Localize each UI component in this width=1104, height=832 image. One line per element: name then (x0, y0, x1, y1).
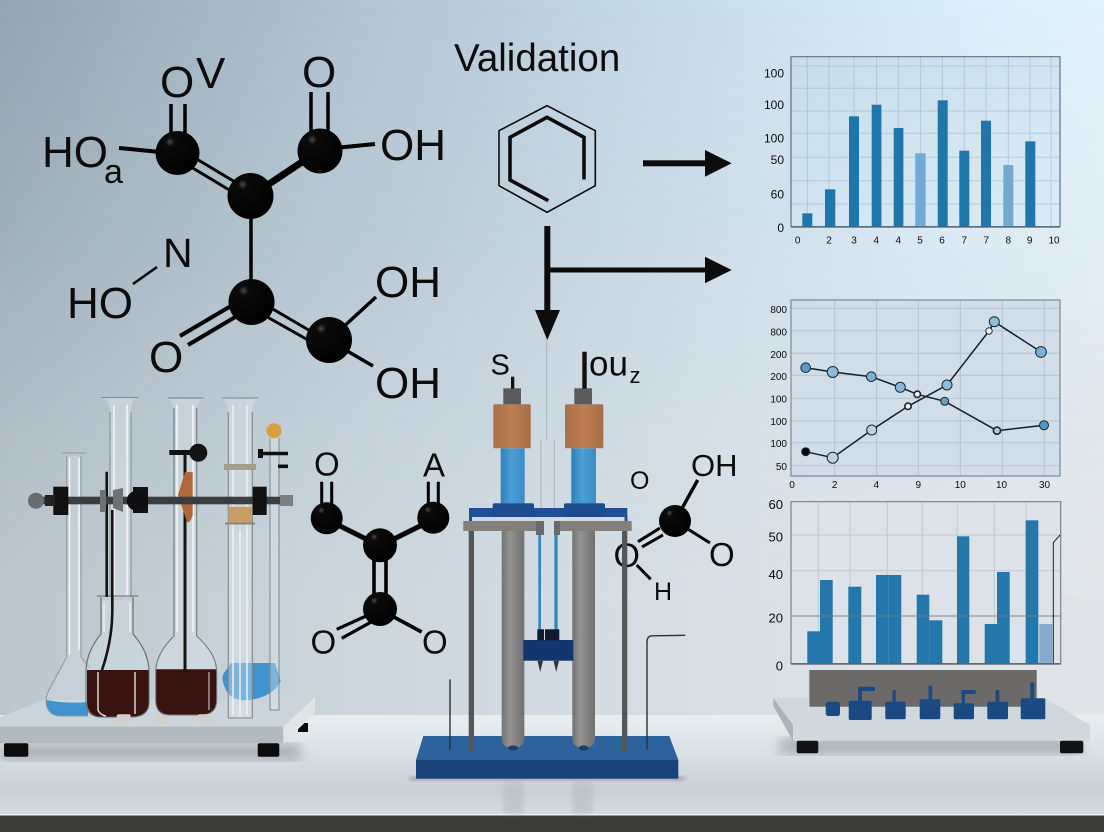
y axis labels: 60 (769, 497, 783, 512)
molecule: lower centre-left: O (314, 446, 340, 482)
y axis labels: 800 (770, 305, 787, 316)
atom labels (42, 48, 446, 408)
molecule: lower centre-left: O (310, 624, 336, 660)
x axis labels: 7 (984, 236, 990, 246)
y axis labels: 50 (776, 462, 787, 473)
weights (826, 682, 1045, 720)
tube and flask: brown liquid 3 (156, 398, 217, 715)
molecule: lower centre-right: O (709, 536, 735, 573)
atom labels: HO (67, 279, 133, 328)
atom labels: V (196, 49, 226, 98)
atom labels: O (149, 333, 183, 382)
molecule: lower centre-left (310, 446, 449, 660)
x axis labels: 10 (955, 480, 966, 491)
orange caps (493, 404, 603, 448)
atom labels: N (163, 230, 193, 276)
x axis labels: 4 (874, 480, 880, 491)
x axis labels: 3 (851, 236, 857, 246)
y axis labels (769, 497, 783, 674)
lab table surface (0, 715, 1104, 832)
x axis labels: 9 (1027, 236, 1033, 246)
y axis labels: 100 (764, 98, 784, 112)
x axis labels (789, 480, 1050, 491)
atom labels: a (104, 153, 123, 191)
tube: tall second (101, 398, 138, 597)
flask: brown liquid 2 (86, 596, 149, 717)
x axis labels: 0 (795, 236, 801, 246)
benzene ring icon (499, 106, 595, 212)
blue cylinders (501, 448, 596, 503)
platform (0, 697, 315, 757)
title: Validation: Validation (454, 37, 620, 80)
chart: bar chart lower right (769, 497, 1061, 674)
clamp rod (28, 487, 293, 515)
small white cylinders (117, 714, 212, 724)
y axis labels: 60 (771, 188, 784, 202)
atom labels: O (302, 48, 336, 97)
x axis labels: 2 (832, 480, 838, 491)
chart: line chart middle right (770, 300, 1060, 491)
atom labels: OH (375, 359, 441, 408)
blue mount and grey bar (463, 503, 632, 535)
molecule: large structure top left (42, 48, 446, 408)
x axis labels: 4 (896, 236, 902, 246)
bars (807, 520, 1052, 664)
atom labels: O (160, 58, 194, 107)
y axis labels: 200 (770, 350, 787, 361)
molecule: lower centre-right (614, 448, 738, 606)
y axis labels: 100 (770, 439, 787, 450)
faint guide line and glass tube (541, 340, 554, 508)
x axis labels: 10 (996, 480, 1007, 491)
x axis labels: 6 (939, 236, 945, 246)
support rods (469, 531, 627, 752)
x axis labels: 2 (826, 236, 832, 246)
blue capillaries (538, 535, 558, 630)
y axis labels: 0 (777, 221, 784, 235)
y axis labels: 100 (764, 132, 784, 146)
x axis labels (795, 236, 1060, 246)
y axis labels: 50 (769, 530, 783, 544)
chart: bar chart top right (764, 57, 1060, 247)
orange sleeve and black stopper (169, 444, 207, 522)
y axis labels: 50 (771, 153, 784, 167)
x axis labels: 5 (917, 236, 923, 246)
molecule: lower centre-left: O (422, 624, 448, 660)
arrow: benzene to bar chart (643, 150, 732, 177)
y axis labels: 200 (770, 372, 787, 383)
x axis labels: 7 (962, 236, 968, 246)
thin tube with gold ball (258, 423, 288, 710)
centre apparatus: z (630, 363, 640, 388)
x axis labels: 9 (916, 480, 922, 491)
flask: narrow-neck left (46, 453, 90, 716)
stand base (416, 736, 678, 779)
test tubes (502, 530, 595, 750)
y axis labels: 100 (764, 66, 784, 80)
left apparatus: glassware on platform (0, 398, 315, 757)
black stirring rods (102, 455, 185, 673)
molecule: lower centre-right: H (654, 578, 672, 606)
atoms (156, 128, 352, 363)
bars (802, 100, 1035, 227)
series lines (806, 322, 1044, 458)
y axis labels (770, 305, 787, 473)
molecule: lower centre-left: A (423, 447, 445, 484)
thin side wires (450, 635, 685, 750)
y axis labels: 800 (770, 328, 787, 338)
x axis labels: 4 (874, 236, 880, 246)
arrow: branch to line chart and apparatus (535, 226, 732, 340)
atom labels: HO (42, 128, 108, 177)
labels: S (490, 349, 510, 381)
grey caps and black rods (503, 352, 592, 404)
molecule: lower centre-right: O (614, 537, 640, 575)
y axis labels (764, 66, 784, 235)
x axis labels: 0 (789, 480, 795, 491)
right platform with weights (773, 670, 1090, 753)
y axis labels: 20 (769, 610, 783, 626)
electrode block (523, 629, 573, 672)
y axis labels: 100 (770, 417, 787, 428)
atom labels: OH (375, 258, 441, 307)
x axis labels: 30 (1039, 480, 1050, 491)
molecule: lower centre-right: O (630, 467, 649, 495)
blue liquid behind tube (223, 663, 281, 700)
y axis labels: 40 (769, 567, 783, 582)
tube: fourth tall cylinder (222, 398, 258, 718)
atom labels: OH (380, 121, 446, 170)
y axis labels: 0 (776, 658, 783, 674)
x axis labels: 10 (1048, 236, 1060, 246)
centre apparatus (416, 340, 685, 779)
y axis labels: 100 (770, 394, 787, 406)
centre apparatus: ou (589, 345, 628, 384)
series markers (801, 317, 1048, 463)
x axis labels: 8 (1006, 236, 1012, 246)
molecule: lower centre-right: OH (691, 448, 738, 483)
